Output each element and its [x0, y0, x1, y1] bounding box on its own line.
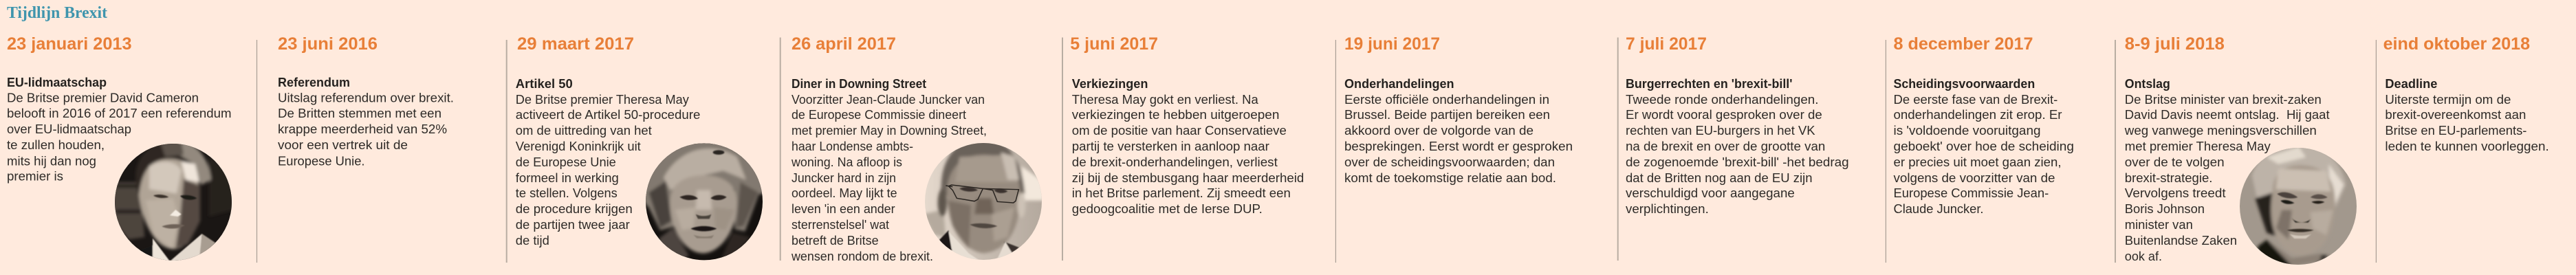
text block — [516, 93, 700, 248]
heading: Ontslag — [2125, 77, 2170, 91]
text block: er precies uit moet gaan zien, — [1894, 155, 2062, 169]
text block: Verenigd Koninkrijk uit — [516, 140, 641, 153]
text block — [1072, 93, 1304, 216]
text block — [2385, 93, 2549, 153]
divider — [1885, 40, 1886, 263]
panel: eind oktober 2018 — [2383, 34, 2549, 153]
text block: de brexit-onderhandelingen, verliest — [1072, 155, 1278, 169]
text block: De Britse minister van brexit-zaken — [2125, 93, 2322, 107]
text block: brexit-strategie. — [2125, 171, 2212, 185]
portrait: Jean-Claude Juncker — [925, 143, 1042, 260]
text block: partij te versterken in aanloop naar — [1072, 140, 1269, 153]
text block — [791, 93, 987, 263]
text block: oordeel. May lijkt te — [792, 186, 897, 200]
text block: verkiezingen te hebben uitgeroepen — [1072, 108, 1279, 122]
heading: Diner in Downing Street — [792, 77, 926, 91]
text block: Uiterste termijn om de — [2385, 93, 2511, 107]
date: 8 december 2017 — [1894, 34, 2033, 54]
heading: Onderhandelingen — [1344, 77, 1454, 91]
text block — [2124, 93, 2330, 263]
text block: komt de toekomstige relatie aan bod. — [1344, 171, 1556, 185]
text block: ook af. — [2125, 250, 2162, 263]
title: Tijdlijn Brexit — [7, 4, 107, 22]
text block: formeel in werking — [516, 171, 619, 185]
text block: De Britten stemmen met een — [278, 107, 441, 120]
divider — [1617, 37, 1619, 261]
text block: de partijen twee jaar — [516, 218, 630, 232]
text block: zij bij de stembusgang haar meerderheid — [1072, 171, 1304, 185]
date: 23 januari 2013 — [7, 34, 132, 54]
text block: na de brexit en over de grootte van — [1626, 140, 1825, 153]
text block: met premier May in Downing Street, — [792, 124, 987, 138]
text block: krappe meerderheid van 52% — [278, 122, 447, 136]
heading: Referendum — [278, 76, 350, 89]
text block: Vervolgens treedt — [2125, 186, 2226, 200]
heading: Burgerrechten en 'brexit-bill' — [1626, 77, 1792, 91]
divider — [2115, 40, 2116, 263]
text block: Eerste officiële onderhandelingen in — [1344, 93, 1549, 107]
text block: om de positie van haar Conservatieve — [1072, 124, 1287, 138]
text block: mits hij dan nog — [7, 154, 96, 168]
text block — [1626, 93, 1849, 216]
text block: haar Londense ambts- — [792, 140, 913, 153]
text block: Britse en EU-parlements- — [2385, 124, 2526, 138]
text block: De Britse premier Theresa May — [516, 93, 689, 107]
text block — [7, 91, 232, 183]
text block: betreft de Britse — [792, 234, 879, 248]
panel: 23 juni 2016 — [278, 34, 454, 168]
text block: leven 'in een ander — [792, 202, 895, 216]
portrait: David Davis — [2240, 148, 2357, 265]
heading: EU-lidmaatschap — [7, 76, 107, 89]
date: 26 april 2017 — [792, 34, 896, 54]
date: 19 juni 2017 — [1344, 34, 1440, 54]
text block: de zogenoemde 'brexit-bill' -het bedrag — [1626, 155, 1849, 169]
text block: De Britse premier David Cameron — [7, 91, 199, 104]
text block: dat de Britten nog aan de EU zijn — [1626, 171, 1813, 185]
text block: onderhandelingen zit erop. Er — [1894, 108, 2062, 122]
text block: De eerste fase van de Brexit- — [1894, 93, 2057, 107]
text block: minister van — [2125, 218, 2193, 232]
heading: Scheidingsvoorwaarden — [1894, 77, 2035, 91]
text block: sterrenstelsel' wat — [792, 218, 889, 232]
text block: geboekt' over hoe de scheiding — [1894, 140, 2074, 153]
text block: gedoogcoalitie met de Ierse DUP. — [1072, 202, 1263, 216]
text block: voor een vertrek uit de — [278, 138, 408, 152]
text block: met premier Theresa May — [2125, 140, 2271, 153]
text block: Theresa May gokt en verliest. Na — [1072, 93, 1259, 107]
text block: premier is — [7, 169, 63, 183]
heading: Verkiezingen — [1072, 77, 1148, 91]
panel: 23 januari 2013 — [7, 34, 235, 263]
date: 23 juni 2016 — [278, 34, 378, 54]
text block — [1344, 93, 1573, 185]
heading: Deadline — [2385, 77, 2437, 91]
text block: belooft in 2016 of 2017 een referendum — [7, 107, 232, 120]
text block: de Europese Commissie dineert — [792, 108, 966, 122]
date: 8-9 juli 2018 — [2125, 34, 2225, 54]
icon: glasses — [946, 185, 1018, 203]
date: eind oktober 2018 — [2383, 34, 2530, 54]
text block: de procedure krijgen — [516, 202, 633, 216]
text block: Tweede ronde onderhandelingen. — [1626, 93, 1818, 107]
divider — [256, 40, 257, 263]
panel: 8-9 juli 2018 — [2124, 34, 2359, 270]
text block: de Europese Unie — [516, 155, 616, 169]
text block: Europese Unie. — [278, 154, 364, 168]
panel: 8 december 2017 — [1894, 34, 2074, 216]
text block: over EU-lidmaatschap — [7, 122, 131, 136]
text block: Brussel. Beide partijen bereiken een — [1344, 108, 1550, 122]
heading: Artikel 50 — [516, 77, 573, 91]
panel: 19 juni 2017 — [1344, 34, 1573, 185]
divider — [1335, 40, 1336, 263]
text block: Claude Juncker. — [1894, 202, 1983, 216]
text block: om de uittreding van het — [516, 124, 652, 138]
text block: Europese Commissie Jean- — [1894, 186, 2049, 200]
date: 29 maart 2017 — [517, 34, 634, 54]
text block: Buitenlandse Zaken — [2125, 234, 2237, 248]
divider — [1062, 37, 1063, 261]
text block: de tijd — [516, 234, 549, 248]
panel: 7 juli 2017 — [1626, 34, 1849, 216]
text block: in het Britse parlement. Zij smeedt een — [1072, 186, 1291, 200]
text block: Boris Johnson — [2125, 202, 2205, 216]
text block: te zullen houden, — [7, 138, 105, 152]
text block: weg vanwege meningsverschillen — [2124, 124, 2317, 138]
text block: over de scheidingsvoorwaarden; dan — [1344, 155, 1555, 169]
date: 7 juli 2017 — [1626, 34, 1707, 54]
text block: besprekingen. Eerst wordt er gesproken — [1344, 140, 1573, 153]
panel: 5 juni 2017 — [1070, 34, 1304, 216]
text block: brexit-overeenkomst aan — [2385, 108, 2526, 122]
panel: 26 april 2017 — [791, 34, 1045, 263]
text block: leden te kunnen voorleggen. — [2385, 140, 2549, 153]
divider — [506, 40, 507, 263]
divider — [780, 37, 781, 261]
text block — [1894, 93, 2074, 216]
text block: wensen rondom de brexit. — [791, 250, 933, 263]
date: 5 juni 2017 — [1070, 34, 1158, 54]
text block: is 'voldoende vooruitgang — [1894, 124, 2041, 138]
text block: David Davis neemt ontslag. Hij gaat — [2125, 108, 2330, 122]
text block: volgens de voorzitter van de — [1894, 171, 2055, 185]
text block: Er wordt vooral gesproken over de — [1626, 108, 1822, 122]
panel: 29 maart 2017 — [516, 34, 772, 265]
divider — [2375, 40, 2377, 263]
portrait: Theresa May — [646, 143, 763, 260]
text block: Juncker hard in zijn — [792, 171, 896, 185]
text block: woning. Na afloop is — [791, 155, 902, 169]
text block: Voorzitter Jean-Claude Juncker van — [792, 93, 985, 107]
text block: verplichtingen. — [1626, 202, 1709, 216]
text block: verschuldigd voor aangegane — [1626, 186, 1795, 200]
text block: te stellen. Volgens — [516, 186, 618, 200]
text block: over de te volgen — [2125, 155, 2225, 169]
text block: activeert de Artikel 50-procedure — [516, 108, 700, 122]
portrait: David Cameron — [113, 140, 235, 263]
text block: rechten van EU-burgers in het VK — [1626, 124, 1815, 138]
text block — [278, 91, 454, 168]
text block: Uitslag referendum over brexit. — [278, 91, 454, 104]
text block: akkoord over de volgorde van de — [1344, 124, 1533, 138]
